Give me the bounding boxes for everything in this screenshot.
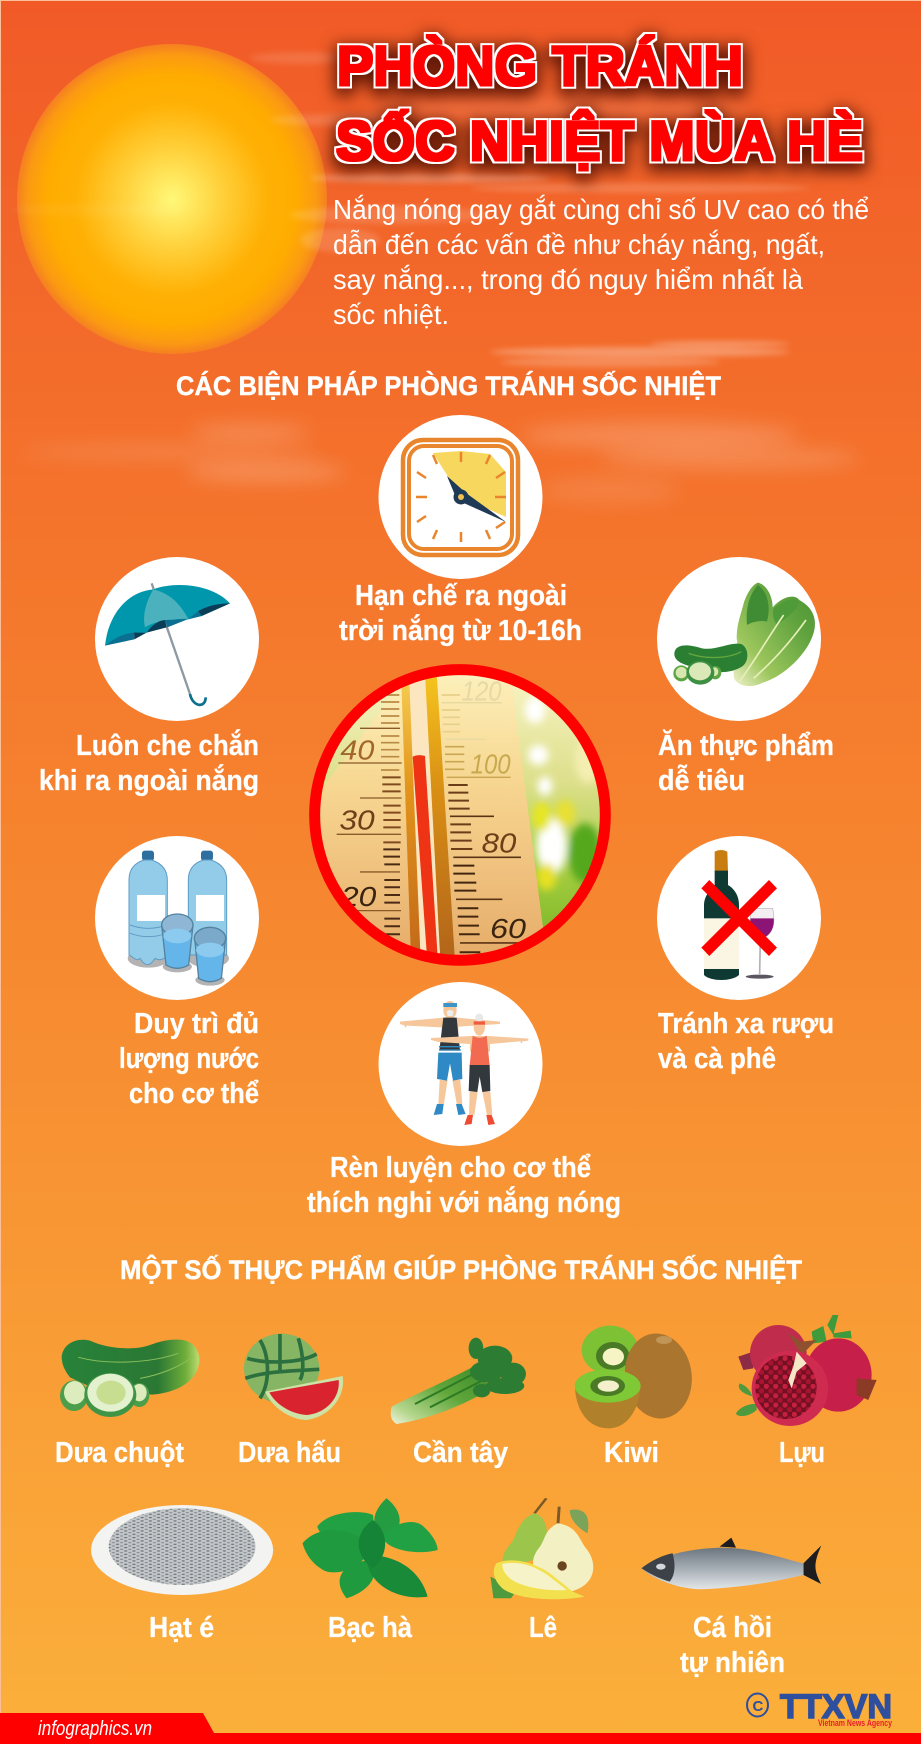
circle <box>657 836 821 1000</box>
title: SỐC NHIỆT MÙA HÈ <box>336 109 863 172</box>
label <box>119 1008 259 1110</box>
label: Duy trì đủ <box>134 1008 259 1040</box>
icon: two athletes <box>400 1001 528 1125</box>
thermometer scale numbers: 60 <box>490 913 526 944</box>
label: lượng nước <box>119 1043 259 1075</box>
image <box>575 1326 697 1428</box>
thermometer scale numbers: 20 <box>340 881 377 912</box>
food: mint <box>303 1498 438 1644</box>
label: Lê <box>529 1612 557 1644</box>
heading: foods: MỘT SỐ THỰC PHẨM GIÚP PHÒNG TRÁNH SỐC NHIỆT <box>120 1253 802 1285</box>
thermometer scale numbers <box>339 676 526 944</box>
label: Hạn chế ra ngoài <box>355 580 567 612</box>
title <box>336 34 863 172</box>
footer site name: infographics.vn <box>38 1718 152 1740</box>
circle <box>378 982 542 1146</box>
clouds behind the clock <box>20 421 860 504</box>
panel: limit going out 10-16h <box>339 415 582 647</box>
footer band <box>0 1713 921 1744</box>
label: Dưa chuột <box>55 1437 184 1469</box>
icon: wine bottle and glass crossed out <box>701 850 777 980</box>
intro text: dẫn đến các vấn đề như cháy nắng, ngất, <box>333 229 825 260</box>
food: kiwi <box>575 1326 697 1469</box>
label: cho cơ thể <box>129 1078 259 1110</box>
label <box>680 1612 785 1679</box>
image <box>244 1334 343 1420</box>
icon: lettuce and cucumber <box>673 583 815 686</box>
thermometer scale numbers: 120 <box>462 676 502 707</box>
thermometer scale numbers: 30 <box>339 804 375 835</box>
label: Hạt é <box>149 1612 214 1644</box>
intro text: sốc nhiệt. <box>333 299 449 330</box>
icon: clock <box>403 440 518 555</box>
clouds around the title <box>10 52 810 367</box>
panel: acclimatise body <box>307 982 621 1219</box>
food: pear <box>490 1498 593 1644</box>
thermometer scale numbers: 100 <box>471 748 511 779</box>
label: Dưa hấu <box>238 1437 341 1469</box>
icon: umbrella <box>105 583 230 705</box>
copyright mark <box>747 1694 768 1716</box>
image <box>60 1339 199 1417</box>
food: chia seeds <box>91 1505 273 1644</box>
label: khi ra ngoài nắng <box>39 763 259 797</box>
label: Rèn luyện cho cơ thể <box>330 1152 591 1184</box>
circle <box>95 557 259 721</box>
label: Lựu <box>779 1437 825 1469</box>
label <box>339 580 582 647</box>
label: thích nghi với nắng nóng <box>307 1185 621 1219</box>
panel: easy-to-digest food <box>657 557 834 797</box>
red ring <box>315 670 605 960</box>
label: Cần tây <box>413 1437 508 1469</box>
wordmark: TTXVN <box>780 1688 892 1726</box>
image <box>490 1498 593 1599</box>
label <box>658 729 834 797</box>
food: watermelon <box>238 1334 343 1469</box>
label: dễ tiêu <box>658 763 745 797</box>
food: pomegranate <box>736 1315 877 1469</box>
image <box>91 1505 273 1595</box>
tagline: Vietnam News Agency <box>818 1718 892 1728</box>
food: celery <box>391 1338 526 1469</box>
label: Tránh xa rượu <box>658 1008 834 1040</box>
label: Kiwi <box>604 1437 659 1469</box>
panel: keep hydrated <box>95 836 259 1110</box>
image <box>736 1315 877 1426</box>
thermometer scale numbers: 80 <box>482 827 517 858</box>
circle <box>378 415 542 579</box>
image <box>303 1498 438 1598</box>
panel: always shade <box>39 557 259 797</box>
title: PHÒNG TRÁNH <box>337 34 743 97</box>
label: và cà phê <box>658 1043 776 1075</box>
intro text <box>333 194 869 330</box>
label <box>39 728 259 797</box>
label <box>658 1008 834 1075</box>
intro text: say nắng..., trong đó nguy hiểm nhất là <box>333 264 803 295</box>
icon: sun <box>17 44 327 354</box>
heading: measures: CÁC BIỆN PHÁP PHÒNG TRÁNH SỐC NHIỆT <box>176 369 721 401</box>
label <box>307 1152 621 1219</box>
label: Ăn thực phẩm <box>658 729 834 762</box>
logo: TTXVN <box>747 1688 892 1728</box>
label: tự nhiên <box>680 1647 785 1679</box>
panel: avoid alcohol and coffee <box>657 836 834 1075</box>
image <box>641 1538 821 1589</box>
panel: central thermometer photo <box>305 660 615 970</box>
food: cucumber <box>55 1339 199 1469</box>
icon: water bottles and glasses <box>128 851 229 986</box>
food: salmon <box>641 1538 821 1679</box>
circle <box>657 557 821 721</box>
image <box>391 1338 526 1424</box>
label: Bạc hà <box>328 1612 413 1644</box>
copyright mark: C <box>752 1698 764 1715</box>
label: trời nắng từ 10-16h <box>339 613 582 647</box>
photo <box>320 675 600 955</box>
circle <box>95 836 259 1000</box>
label: Cá hồi <box>693 1612 772 1644</box>
intro text: Nắng nóng gay gắt cùng chỉ số UV cao có thể <box>333 194 869 225</box>
thermometer scale numbers: 40 <box>340 734 375 765</box>
label: Luôn che chắn <box>76 728 259 762</box>
